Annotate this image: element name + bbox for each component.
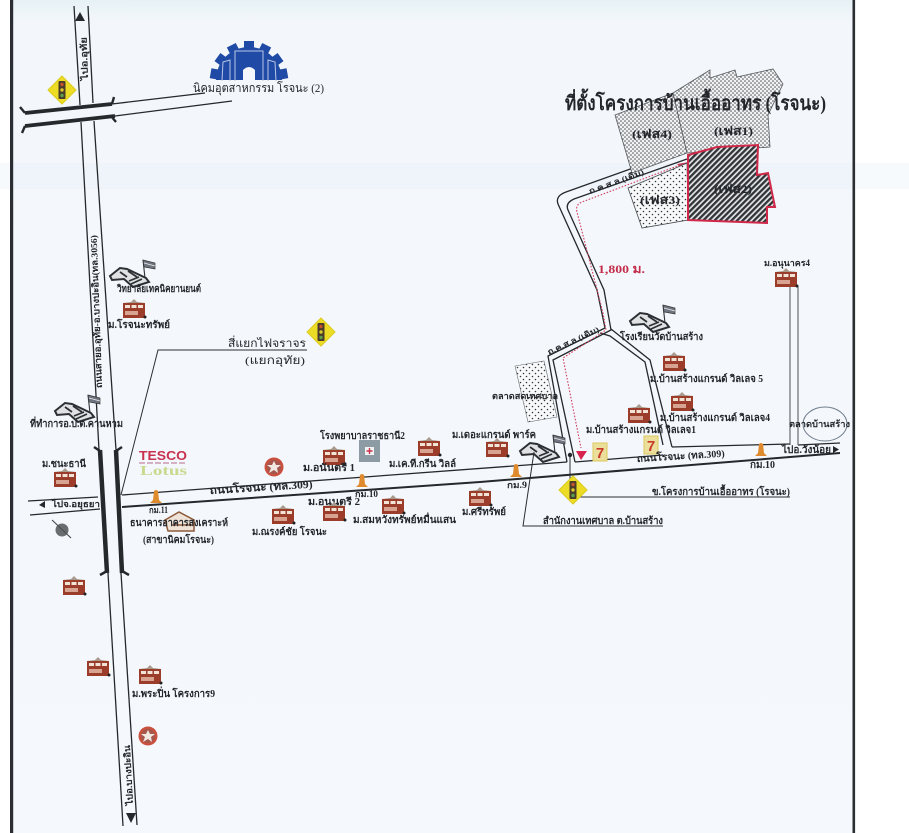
icon: Chana Thani village xyxy=(54,468,78,488)
road label: to Wang Noi: ไปอ.วังน้อย xyxy=(781,443,831,456)
label: industrial estate: นิคมอุตสาหกรรม โรจนะ (2) xyxy=(193,81,324,96)
road: Rojana road 309 xyxy=(122,443,840,507)
label: Somwang village: ม.สมหวังทรัพย์หมื่นแสน xyxy=(353,512,456,526)
km marker 11: กม.11 xyxy=(149,505,168,515)
callout: traffic light junction xyxy=(121,318,335,495)
icon: gas station west xyxy=(264,458,284,476)
km marker 9 xyxy=(507,464,528,490)
km marker 10 east: กม.10 xyxy=(750,460,775,471)
icon: convenience store 2 xyxy=(644,436,658,455)
km marker 11 xyxy=(149,490,168,515)
icon: Somwang village xyxy=(382,495,406,514)
title: ที่ตั้งโครงการบ้านเอื้ออาทร (โรจนะ) xyxy=(565,88,826,115)
label: Anuntakorn 4 village: ม.อนุนาคร4 xyxy=(764,258,810,269)
label: Chana Thani village: ม.ชนะธานี xyxy=(42,458,86,470)
icon: Phra Pin 9 village xyxy=(139,665,162,684)
icon: Ananta 1 village xyxy=(323,446,346,466)
icon: Grand Village 4 xyxy=(671,392,694,412)
phase 1 plot xyxy=(673,69,783,153)
phase 3 plot xyxy=(628,163,688,228)
icon: Ananta 2 village xyxy=(323,502,346,522)
phase labels: (เฟส3) xyxy=(640,193,680,207)
km marker 9: กม.9 xyxy=(507,480,528,490)
road label: to Uthai: ไปอ.อุทัย xyxy=(78,37,91,82)
label: hospital: โรงพยาบาลราชธานี2 xyxy=(319,429,405,442)
km marker 10 east xyxy=(750,443,775,471)
icon: convenience store 1 xyxy=(593,443,607,462)
road: Uthai to Bang Pa-in highway 3056 xyxy=(74,6,137,826)
icon: unnamed village south xyxy=(87,657,110,676)
label: municipal market: ตลาดสดเทศบาล xyxy=(492,391,558,401)
label: Grand Village 4: ม.บ้านสร้างแกรนด์ วิลเลจ4 xyxy=(660,412,770,424)
site plan phases xyxy=(615,69,783,228)
icon: KT Green Ville village xyxy=(418,437,442,456)
phase 4 plot xyxy=(615,93,687,173)
road name: lower concrete road: ถ.ค.ส.ล.(เดิม) xyxy=(546,325,601,357)
phase 2 plot xyxy=(688,145,775,223)
icon: traffic light at Uthai interchange xyxy=(48,76,76,104)
logo: Tesco Lotus: Lotus xyxy=(140,464,188,479)
callout: project junction traffic light xyxy=(559,453,790,504)
label: SAO office: ที่ทำการอ.บ.ต.คานหาม xyxy=(30,416,123,430)
icon: school xyxy=(630,305,675,332)
icon: Anuntakorn 4 village xyxy=(775,268,798,288)
label: The Grand Park village: ม.เดอะแกรนด์ พาร์ค xyxy=(452,429,536,441)
phase labels: (เฟส2) xyxy=(714,182,752,196)
phase labels xyxy=(632,124,753,207)
road label: Rojana road east: ถนนโรจนะ (ทล.309) xyxy=(636,447,725,465)
callout: traffic light junction: สี่แยกไฟจราจร xyxy=(228,335,306,350)
callout: Ban Sang market xyxy=(789,407,850,441)
road label: highway 3056: ถนนสายอ.อุทัย-อ.บางปะอิน(ทล.3056) xyxy=(89,235,105,388)
label: Ananta 1 village: ม.อนันตรี 1 xyxy=(303,462,355,474)
label: Narong Chai village: ม.ณรงค์ชัย โรจนะ xyxy=(252,525,327,538)
side roads to project xyxy=(548,149,798,462)
icon: hospital xyxy=(359,440,380,462)
road label: to Bang Pa-in: ไปอ.บางปะอิน xyxy=(121,744,135,807)
phase labels: (เฟส1) xyxy=(714,124,753,138)
label: Rojana Sap village: ม.โรจนะทรัพย์ xyxy=(108,318,170,331)
label: GH Bank: ธนาคารอาคารสงเคราะห์ xyxy=(130,517,228,529)
logo: Tesco Lotus: TESCO xyxy=(139,448,187,463)
label: GH Bank xyxy=(130,517,228,546)
icon: gas station south xyxy=(138,726,158,746)
label: Sri Sap village: ม.ศรีทรัพย์ xyxy=(462,506,506,518)
road label: Rojana road west: ถนนโรจนะ (ทล.309) xyxy=(209,477,313,497)
label: Grand Village 5: ม.บ้านสร้างแกรนด์ วิลเลจ 5 xyxy=(650,373,763,385)
road: Highway overpass to industrial estate xyxy=(20,93,232,133)
icon: roundabout symbol xyxy=(52,520,71,538)
callout: municipal office: สำนักงานเทศบาล ต.บ้านสร้าง xyxy=(543,515,663,527)
km marker 10 west: กม.10 xyxy=(355,489,378,499)
icon: technical college xyxy=(110,260,155,287)
km marker 10 west xyxy=(355,474,378,499)
label: GH Bank: (สาขานิคมโรจนะ) xyxy=(143,533,214,546)
label: technical college: วิทยาลัยเทคนิคยานยนต์ xyxy=(117,283,201,295)
callout: Ban Sang market: ตลาดบ้านสร้าง xyxy=(789,419,850,429)
road label: to Ayutthaya: ไปจ.อยุธยา xyxy=(51,498,100,510)
phase labels: (เฟส4) xyxy=(632,127,672,141)
icon: industrial estate logo xyxy=(210,41,288,82)
label: school: โรงเรียนวัดบ้านสร้าง xyxy=(619,330,703,343)
icon: Sri Sap village xyxy=(469,487,492,506)
distance label: 1,800 ม. xyxy=(598,262,645,276)
callout: project junction traffic light: ข.โครงการบ้านเอื้ออาทร (โรจนะ) xyxy=(652,484,790,498)
market plot xyxy=(515,361,557,422)
icon: unnamed village west xyxy=(63,576,86,596)
label: Ananta 2 village: ม.อนนตรี 2 xyxy=(308,496,360,508)
icon: municipal office xyxy=(520,435,565,462)
road name: upper concrete road: ถ.ค.ส.ล.(เดิม) xyxy=(588,167,646,196)
icon: The Grand Park village xyxy=(486,438,510,458)
label: Phra Pin 9 village: ม.พระปิ่น โครงการ9 xyxy=(132,686,215,700)
label: KT Green Ville village: ม.เค.ที.กรีน วิลล์ xyxy=(389,458,456,470)
icon: Grand Village 1 xyxy=(628,404,652,424)
road: to Ayutthaya xyxy=(28,497,100,515)
icon: SAO office xyxy=(55,395,100,422)
icon: Narong Chai village xyxy=(272,505,296,524)
icon: Rojana Sap village xyxy=(123,299,146,318)
icon: Grand Village 5 xyxy=(663,352,686,372)
label: Grand Village 1: ม.บ้านสร้างแกรนด์ วิลเลจ1 xyxy=(586,424,696,436)
icon: bank xyxy=(165,512,194,531)
red dotted access route xyxy=(563,162,689,460)
callout: traffic light junction: (แยกอุทัย) xyxy=(245,355,305,367)
callout: municipal office xyxy=(523,452,663,527)
logo: Tesco Lotus xyxy=(139,448,188,479)
